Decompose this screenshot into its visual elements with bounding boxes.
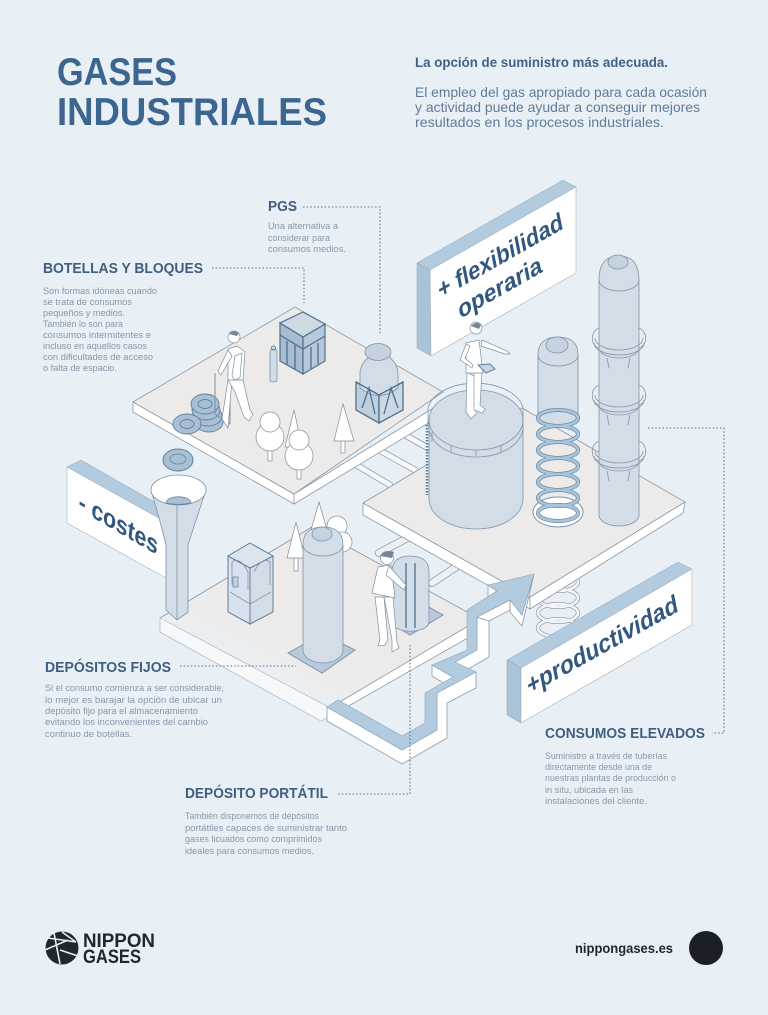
text: botellas y bloques: incluso en aquellos casos xyxy=(43,341,147,352)
text: consumos elevados: instalaciones del cliente. xyxy=(545,796,647,807)
sign: flexibilidad xyxy=(417,180,576,356)
text: depositos fijos xyxy=(45,658,224,740)
sign: productividad xyxy=(507,562,692,723)
icon: trees on upper platform xyxy=(256,404,354,479)
text: depositos fijos: DEPÓSITOS FIJOS xyxy=(45,658,171,676)
icon: small gas bottle xyxy=(270,346,277,382)
text: botellas y bloques: o falta de espacio. xyxy=(43,363,117,374)
icon: person with trolley xyxy=(215,331,253,428)
text: depositos fijos: continuo de botellas. xyxy=(45,729,132,740)
icon: person at portable deposit xyxy=(372,551,406,652)
platform: lower deposits xyxy=(160,527,480,721)
sign: costes: - costes xyxy=(77,486,160,560)
intro text: La opción de suministro más adecuada. xyxy=(415,55,668,70)
leader: consumos elevados xyxy=(648,428,724,733)
text: deposito portatil: ideales para consumos medios. xyxy=(185,846,314,857)
sign: flexibilidad: + flexibilidad xyxy=(436,206,565,305)
spring below the platform xyxy=(538,573,578,637)
text: depositos fijos: evitando los inconvenientes del cambio xyxy=(45,717,208,728)
text: depositos fijos: lo mejor es barajar la opción de ubicar un xyxy=(45,695,222,706)
text: depositos fijos: Si el consumo comienza a ser considerable, xyxy=(45,683,224,694)
text: botellas y bloques: pequeños y medios. xyxy=(43,308,125,319)
title: INDUSTRIALES xyxy=(57,91,327,134)
sign: costes xyxy=(67,460,172,578)
text: consumos elevados: in situ, ubicada en las xyxy=(545,785,633,796)
text: botellas y bloques: consumos intermitentes e xyxy=(43,330,151,341)
leader: deposito portatil xyxy=(338,645,410,794)
arrow xyxy=(327,574,534,764)
platform: high consumption xyxy=(363,408,685,609)
text: consumos elevados: Suministro a través de tuberías xyxy=(545,751,667,762)
text: deposito portatil: portátiles capaces de suministrar tanto xyxy=(185,823,347,834)
text: botellas y bloques: con dificultades de acceso xyxy=(43,352,153,363)
intro text: y actividad puede ayudar a conseguir mejores xyxy=(415,99,700,115)
text: botellas y bloques xyxy=(43,261,203,374)
icon: PGS cage xyxy=(280,312,325,374)
text: deposito portatil: DEPÓSITO PORTÁTIL xyxy=(185,784,328,802)
connecting pipes xyxy=(353,435,462,583)
text: PGS: consumos medios. xyxy=(268,244,346,255)
title xyxy=(57,51,327,134)
logo: Nippon Gases: NIPPON xyxy=(83,931,155,952)
text: botellas y bloques: Son formas idóneas cuando xyxy=(43,286,157,297)
text: PGS: Una alternativa a xyxy=(268,221,339,232)
icon: coin stack xyxy=(173,394,223,434)
icon: person on tank xyxy=(460,322,510,419)
title: GASES xyxy=(57,51,177,94)
text: deposito portatil: También disponemos de depósitos xyxy=(185,811,319,822)
leader: botellas xyxy=(212,268,304,303)
icon: fixed deposit cylinder xyxy=(288,527,355,673)
intro text: resultados en los procesos industriales. xyxy=(415,114,664,130)
footer badge xyxy=(689,931,723,965)
intro text: El empleo del gas apropiado para cada ocasión xyxy=(415,84,707,100)
icon: tall column xyxy=(592,255,646,526)
icon: portable deposit xyxy=(392,556,443,635)
logo: Nippon Gases: GASES xyxy=(83,947,141,968)
leader: PGS xyxy=(303,207,380,335)
intro text xyxy=(415,55,707,130)
icon: large tank with railing xyxy=(427,383,523,529)
text: botellas y bloques: se trata de consumos xyxy=(43,297,132,308)
text: consumos elevados xyxy=(545,726,705,807)
footer url: nippongases.es xyxy=(575,940,673,956)
text: consumos elevados: directamente desde una de xyxy=(545,762,652,773)
text: botellas y bloques: También lo son para xyxy=(43,319,124,330)
text: PGS xyxy=(268,199,346,255)
icon: funnel with coin xyxy=(151,449,206,620)
leader: depositos fijos xyxy=(180,665,296,667)
text: deposito portatil: gases licuados como comprimidos xyxy=(185,834,322,845)
text: consumos elevados: nuestras plantas de producción o xyxy=(545,773,676,784)
text: botellas y bloques: BOTELLAS Y BLOQUES xyxy=(43,261,203,277)
text: deposito portatil xyxy=(185,784,347,857)
text: PGS: considerar para xyxy=(268,233,331,244)
sign: productividad: +productividad xyxy=(524,588,680,701)
icon: PGS tank on frame xyxy=(356,344,403,423)
text: PGS: PGS xyxy=(268,199,297,215)
icon: coil column xyxy=(533,337,583,527)
text: consumos elevados: CONSUMOS ELEVADOS xyxy=(545,726,705,742)
sign: flexibilidad: operaria xyxy=(456,249,544,325)
logo: Nippon Gases xyxy=(45,931,155,968)
platform: bottles and blocks xyxy=(133,307,443,504)
icon: storage cabinet xyxy=(228,543,273,624)
text: depositos fijos: depósito fijo para el almacenamiento xyxy=(45,706,198,717)
icon: trees on lower platform xyxy=(287,502,352,571)
